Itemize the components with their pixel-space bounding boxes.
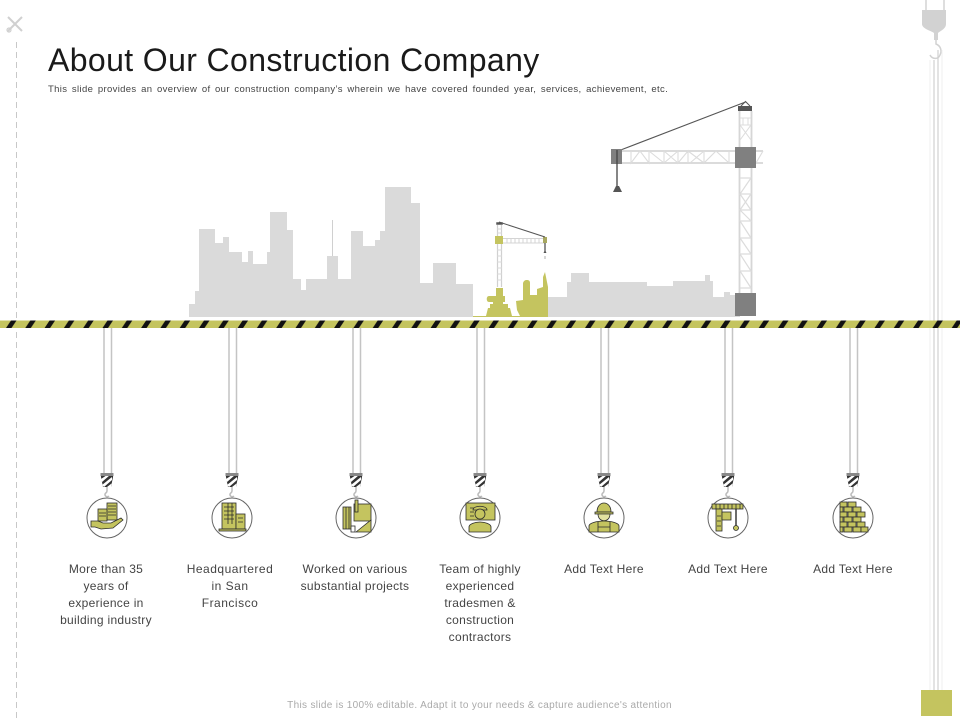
column 3	[301, 328, 409, 593]
footer note: This slide is 100% editable. Adapt it to your needs & capture audience's attention	[287, 700, 672, 711]
city skyline illustration	[0, 100, 960, 328]
column 7	[813, 328, 893, 576]
text: Headquartered	[187, 562, 273, 576]
text	[60, 562, 152, 627]
subtitle: This slide provides an overview of our construction company’s wherein we have covered founded year, services, achievement, etc.	[48, 84, 668, 95]
text	[187, 562, 273, 610]
text	[301, 562, 409, 593]
text: building industry	[60, 613, 152, 627]
text: years of	[83, 579, 129, 593]
text: substantial projects	[301, 579, 409, 593]
text: in San	[211, 579, 249, 593]
text: tradesmen &	[444, 596, 516, 610]
text: Add Text Here	[688, 562, 768, 576]
excavator silhouette	[486, 288, 512, 316]
text: Francisco	[202, 596, 258, 610]
column 1	[60, 328, 152, 627]
large tower crane	[611, 102, 763, 316]
hanger and icon: engineer with plan board	[460, 328, 500, 538]
hazard stripe bar	[0, 320, 960, 328]
hanger and icon: brick wall	[832, 328, 874, 538]
hanger and icon: hand holding buildings	[86, 328, 128, 538]
text: construction	[446, 613, 514, 627]
ground line	[473, 316, 548, 318]
corner accent square	[921, 690, 952, 716]
column 4	[439, 328, 521, 644]
hanger and icon: gantry crane	[708, 328, 748, 538]
icon: tools	[6, 16, 22, 33]
title: About Our Construction Company	[48, 42, 540, 78]
column 2	[187, 328, 273, 610]
text: experienced	[446, 579, 514, 593]
text	[439, 562, 521, 644]
text: Add Text Here	[813, 562, 893, 576]
column 5	[564, 328, 644, 576]
text: Add Text Here	[564, 562, 644, 576]
hanger and icon: construction worker	[584, 328, 624, 538]
right skyline silhouette	[548, 273, 740, 317]
left dashed guide line	[16, 42, 17, 718]
column 6	[688, 328, 768, 576]
icon: corner crane hook with cables	[922, 0, 946, 690]
small tower crane	[495, 222, 547, 287]
hanger and icon: blueprints and tools	[336, 328, 376, 538]
text: More than 35	[69, 562, 143, 576]
left skyline silhouette	[189, 187, 473, 317]
text: experience in	[68, 596, 144, 610]
text: Worked on various	[303, 562, 407, 576]
text: contractors	[449, 630, 511, 644]
text: Team of highly	[439, 562, 521, 576]
yellow building silhouette	[516, 272, 548, 316]
hanger and icon: office buildings	[212, 328, 252, 538]
